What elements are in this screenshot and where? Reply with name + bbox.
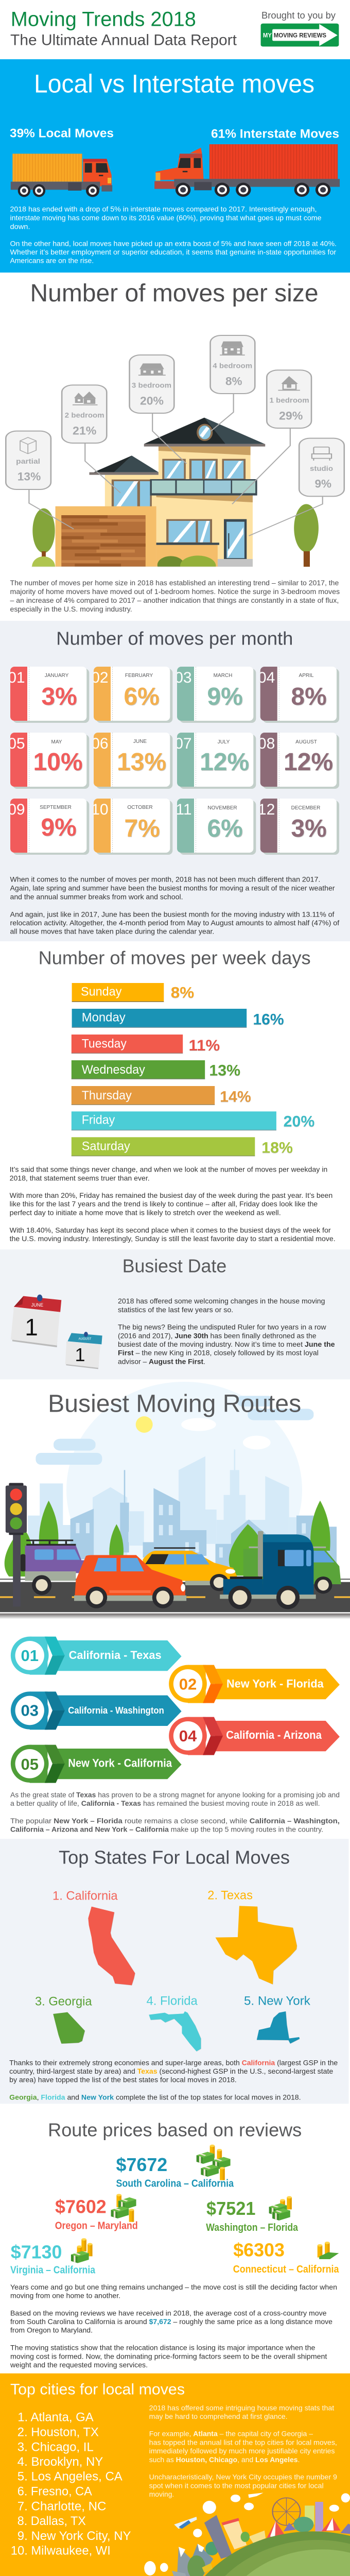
- card: march: MARCH: [214, 673, 232, 679]
- heading: Top States For Local Moves: [59, 1846, 290, 1868]
- bar: tuesday: Tuesday: [82, 1037, 127, 1050]
- text block: – an increase of 4% compared to 2017 – another indication that things are constantly in a state of flux,: [10, 596, 339, 604]
- state: california: 1. California: [52, 1889, 118, 1903]
- card: december: [258, 799, 339, 855]
- bubble: 2 bedroom: 21%: [73, 424, 96, 437]
- text block: immediately followed by much more justifiable city entries: [149, 2447, 335, 2455]
- route 05: New York - California: [68, 1756, 172, 1769]
- bar: saturday: Saturday: [82, 1140, 130, 1154]
- panel: top states for local moves: [0, 1839, 349, 2104]
- text block: Americans are on the rise.: [10, 257, 94, 265]
- text block: majority of home movers have moved out of 1-bedroom homes. Notice the surge in 3-bedroom moves: [10, 587, 340, 596]
- bar: wednesday: [72, 1060, 240, 1079]
- text block: busiest date of the moving industry. Now it’s time to meet June the: [118, 1340, 335, 1348]
- bar: monday: [72, 1009, 284, 1028]
- state: texas: 2. Texas: [207, 1889, 253, 1903]
- text block: such as Houston, Chicago, and Los Angeles.: [149, 2455, 300, 2464]
- bar chart: [72, 983, 314, 1157]
- bubble: studio: [299, 438, 344, 496]
- heading: Busiest Moving Routes: [48, 1391, 301, 1418]
- card: march: [174, 667, 256, 723]
- text block: has topped the annual list of the top cities for local moves,: [149, 2438, 337, 2446]
- card: february: 02: [91, 669, 109, 686]
- city list: 5. Los Angeles, CA: [18, 2470, 122, 2484]
- card: march: 03: [174, 669, 192, 686]
- route 04: California - Arizona: [226, 1728, 322, 1741]
- card: may: MAY: [51, 739, 62, 745]
- text block: all house moves that have taken place during the calendar year.: [10, 927, 214, 936]
- price: connecticut to california: Connecticut – California: [233, 2264, 339, 2275]
- text block: Uncharacteristically, New York City occupies the number 9: [149, 2473, 337, 2481]
- icon: red truck: [154, 144, 340, 197]
- bar: monday: 16%: [253, 1011, 284, 1028]
- illustration: city traffic: [0, 1382, 350, 1619]
- state: florida: 4. Florida: [146, 1994, 198, 2008]
- card: december: DECEMBER: [291, 805, 320, 811]
- text block: Whether it’s better employment or superior education, it seems that genuine in-state opportunities for: [10, 248, 336, 256]
- text block: [149, 2403, 337, 2498]
- state: california: [52, 1889, 135, 1985]
- price: south carolina to california: [116, 2145, 234, 2190]
- bubble: 4 bedroom: 4 bedroom: [213, 361, 252, 369]
- card: january: JANUARY: [45, 673, 69, 679]
- bubble: 2 bedroom: 2 bedroom: [65, 411, 104, 419]
- bubble: partial: 13%: [18, 470, 41, 483]
- bar: wednesday: Wednesday: [82, 1063, 145, 1077]
- price: oregon to maryland: Oregon – Maryland: [55, 2221, 138, 2232]
- bubble: 2 bedroom: [62, 385, 107, 443]
- card: december: 12: [258, 801, 275, 818]
- card: november: 6%: [207, 815, 243, 842]
- logo: my moving reviews: MOVING REVIEWS: [274, 31, 326, 39]
- route 05: [11, 1745, 182, 1783]
- icon: yellow truck: [11, 154, 112, 197]
- city list: [11, 2410, 131, 2558]
- text block: weight and the requested moving services.: [10, 2361, 148, 2369]
- card: june: 13%: [117, 749, 166, 776]
- price: washington to florida: Washington – Florida: [206, 2222, 299, 2233]
- heading: Local vs Interstate moves: [34, 69, 314, 98]
- text block: When it comes to the number of moves per month, 2018 has not been much different than 2017.: [10, 875, 320, 884]
- card: july: [174, 733, 256, 789]
- panel: moves per month: [0, 621, 350, 941]
- text block: like this for the last 7 years and the trend is likely to continue – after all, Friday does look like the: [10, 1200, 318, 1208]
- route 02: New York - Florida: [226, 1677, 324, 1690]
- card: march: 9%: [207, 683, 243, 710]
- panel: top cities for local moves: [0, 2374, 350, 2576]
- illustration: globe with city: [139, 2493, 350, 2576]
- text block: 2018 has offered some intriguing house moving stats that: [149, 2403, 334, 2412]
- text block: First – the new King in 2018, closely followed by its most loyal: [118, 1349, 319, 1357]
- text block: [10, 1165, 336, 1243]
- text block: down.: [10, 223, 30, 231]
- logo: my moving reviews: MY: [263, 31, 272, 39]
- card: december: 3%: [291, 815, 327, 842]
- bubble: 4 bedroom: 8%: [225, 375, 242, 387]
- text block: from South Carolina to California is around $7,672 – roughly the same price as a long distance move: [10, 2317, 332, 2326]
- local moves label: 39% Local Moves: [10, 127, 114, 141]
- text block: (2016 and 2017), June 30th has been finally dethroned as the: [118, 1331, 317, 1340]
- card: april: [258, 667, 339, 723]
- text block: [118, 1297, 335, 1365]
- bubble: 4 bedroom: [211, 335, 255, 394]
- text block: perfect day to initiate a home move that is likely to stretch over the weekend as well.: [10, 1208, 281, 1216]
- card: august: 08: [258, 735, 275, 752]
- panel: local vs interstate moves: [0, 59, 350, 273]
- blue truck: [258, 1531, 264, 1577]
- card: september: [8, 799, 89, 855]
- text block: especially in the U.S. moving industry.: [10, 605, 132, 613]
- card: january: 01: [8, 669, 25, 686]
- price: connecticut to california: [233, 2239, 339, 2275]
- bar: thursday: Thursday: [82, 1089, 132, 1103]
- city list: 3. Chicago, IL: [18, 2440, 94, 2454]
- icon: august calendar: 1: [75, 1344, 85, 1365]
- panel: route prices: [10, 2120, 339, 2369]
- card: april: APRIL: [299, 673, 314, 679]
- text block: [10, 875, 339, 936]
- card: june: JUNE: [133, 739, 147, 744]
- text block: 2018 has offered some welcoming changes in the house moving: [118, 1297, 325, 1305]
- state: georgia: 3. Georgia: [35, 1995, 92, 2009]
- card: september: 9%: [41, 814, 77, 841]
- heading: Number of moves per week days: [39, 947, 311, 969]
- bubble: partial: partial: [16, 457, 40, 465]
- card: january: 3%: [41, 683, 77, 710]
- text block: As the great state of Texas has proven to be a strong magnet for anyone looking for a promising job and: [10, 1790, 340, 1799]
- card: august: AUGUST: [295, 739, 317, 745]
- text block: The popular New York – Florida route remains a close second, while California – Washington,: [10, 1817, 340, 1825]
- text block: moving from one home to another.: [10, 2292, 120, 2300]
- card: july: 12%: [200, 749, 249, 776]
- bar: tuesday: [72, 1035, 220, 1054]
- text block: [10, 205, 337, 265]
- logo: my moving reviews: [261, 24, 339, 46]
- bar: friday: Friday: [82, 1113, 115, 1127]
- text block: And again, just like in 2017, June has been the busiest month for the moving industry with 13.11% of: [10, 910, 335, 918]
- state: florida: [146, 1994, 201, 2052]
- text block: 2018 has ended with a drop of 5% in interstate moves compared to 2017. Interestingly enough,: [10, 205, 317, 213]
- card: april: 8%: [291, 683, 327, 710]
- panel: busiest moving routes: [0, 1382, 350, 1834]
- text block: [10, 579, 340, 613]
- text block: country, third-largest state by area) and Texas (second-highest GSP in the U.S., second-largest state: [9, 2067, 333, 2075]
- bubble: 3 bedroom: [130, 355, 174, 413]
- card: november: [176, 799, 256, 855]
- bar: tuesday: 11%: [188, 1037, 220, 1054]
- card: may: [8, 733, 89, 789]
- heading: Number of moves per month: [56, 628, 293, 649]
- price: washington to florida: [206, 2196, 299, 2233]
- card: july: JULY: [218, 739, 230, 745]
- sponsor line: Brought to you by: [261, 10, 336, 21]
- price: south carolina to california: $7672: [116, 2154, 167, 2175]
- card: july: 07: [174, 735, 192, 752]
- bar: thursday: 14%: [220, 1088, 251, 1105]
- route 03: 03: [21, 1702, 39, 1720]
- route 01: 01: [21, 1647, 39, 1665]
- heading: Top cities for local moves: [10, 2381, 185, 2398]
- city list: 9. New York City, NY: [18, 2529, 131, 2543]
- icon: august calendar: AUGUST: [78, 1337, 92, 1341]
- card: february: [91, 667, 172, 723]
- text block: Georgia, Florida and New York complete the list of the top states for local moves in 2018.: [9, 2093, 301, 2102]
- text block: advisor – August the First.: [118, 1357, 205, 1365]
- bubble: 1 bedroom: 1 bedroom: [270, 396, 309, 404]
- route 02: 02: [179, 1675, 197, 1693]
- interstate moves label: 61% Interstate Moves: [211, 127, 339, 141]
- yellow car: [154, 1547, 195, 1549]
- text block: Based on the moving reviews we have received in 2018, the average cost of a cross-country move: [10, 2309, 327, 2317]
- text block: On the other hand, local moves have picked up an extra boost of 5% and have seen off 2018 at 40%.: [10, 239, 337, 247]
- text block: spot when it comes to the most popular cities for local: [149, 2481, 324, 2489]
- card: february: FEBRUARY: [125, 673, 153, 679]
- bar: friday: 20%: [284, 1113, 314, 1130]
- text block: the U.S. moving industry. Interestingly, Sunday is still the least favorite day to start a residential move.: [10, 1234, 336, 1243]
- card: september: 09: [8, 801, 25, 818]
- card: may: 05: [8, 735, 25, 752]
- text block: For example, Atlanta – the capital city of Georgia –: [149, 2430, 313, 2438]
- bar: wednesday: 13%: [209, 1062, 240, 1079]
- card: february: 6%: [124, 683, 160, 710]
- route 01: [11, 1637, 182, 1675]
- bubble: 1 bedroom: 29%: [279, 410, 303, 422]
- price: connecticut to california: $6303: [233, 2239, 285, 2260]
- icon: june calendar: 1: [25, 1314, 38, 1341]
- text block: by area) have topped the list of the best states for local moves in 2018.: [9, 2076, 237, 2084]
- bubble: partial: [6, 431, 51, 489]
- route 04: 04: [179, 1727, 197, 1745]
- title: Moving Trends 2018: [11, 8, 196, 31]
- heading: Busiest Date: [122, 1255, 226, 1276]
- text block: Years come and go but one thing remains unchanged – the move cost is still the deciding factor when: [10, 2283, 337, 2291]
- text block: moving.: [149, 2490, 174, 2498]
- card: october: OCTOBER: [127, 805, 153, 810]
- text block: California – Arizona and New York – California make up the top 5 moving routes in the country.: [10, 1825, 323, 1834]
- heading: Number of moves per size: [30, 280, 318, 307]
- text block: may be hard to comprehend at first glance.: [149, 2412, 288, 2420]
- city list: 10. Milwaukee, WI: [11, 2544, 111, 2558]
- text block: [10, 1790, 340, 1834]
- text block: 2018, that statement seems truer than ever.: [10, 1174, 150, 1182]
- icon: june calendar: [11, 1295, 61, 1347]
- card: june: [91, 733, 172, 789]
- state: new york: 5. New York: [244, 1994, 311, 2008]
- card: may: 10%: [33, 749, 83, 776]
- city list: 2. Houston, TX: [18, 2425, 99, 2439]
- text block: moving cost is formed. Now, the dominating price-forming factors seem to be the overall shipment: [10, 2352, 327, 2360]
- purple car: [26, 1539, 73, 1541]
- text block: interstate moving has come down to its 2016 value (60%), proving that what goes up must come: [10, 214, 322, 222]
- text block: from Oregon to Maryland.: [10, 2326, 93, 2334]
- route 01: California - Texas: [69, 1649, 162, 1662]
- panel: moves per size: [0, 280, 350, 613]
- illustration: house: [0, 418, 350, 577]
- price: south carolina to california: South Carolina – California: [116, 2178, 234, 2190]
- city list: 6. Fresno, CA: [18, 2484, 92, 2498]
- text block: relocation activity. Altogether, the 4-month period from May to August amounts to almost half (47%) of: [10, 919, 339, 927]
- road: [0, 1579, 350, 1580]
- bar: monday: Monday: [82, 1011, 126, 1025]
- bubble: 1 bedroom: [267, 370, 311, 428]
- price: washington to florida: $7521: [206, 2198, 255, 2219]
- card: august: [258, 733, 339, 789]
- card: january: [8, 667, 89, 723]
- bubble: 3 bedroom: 3 bedroom: [132, 381, 171, 389]
- route 03: California - Washington: [68, 1705, 164, 1716]
- text block: Thanks to their extremely strong economies and super-large areas, both California (largest GSP in the: [9, 2058, 338, 2066]
- state: texas: [207, 1889, 297, 1985]
- city list: 7. Charlotte, NC: [18, 2499, 106, 2513]
- route 05: 05: [21, 1755, 39, 1773]
- text block: With more than 20%, Friday has remained the busiest day of the week during the past year. It’s been: [10, 1191, 332, 1199]
- card: october: [91, 799, 172, 855]
- city list: 4. Brooklyn, NY: [18, 2455, 103, 2469]
- card: november: NOVEMBER: [207, 805, 237, 811]
- text block: [10, 2283, 337, 2369]
- route 04: [169, 1717, 340, 1755]
- bar: saturday: [72, 1137, 293, 1157]
- route 03: [11, 1691, 182, 1730]
- state: georgia: [35, 1995, 92, 2044]
- text block: and the annual summer breaks from work and school.: [10, 892, 183, 901]
- bar: saturday: 18%: [261, 1140, 293, 1157]
- text block: a better quality of life, California - Texas has remained the busiest moving route in 2018 as well.: [10, 1799, 320, 1807]
- icon: june calendar: JUNE: [31, 1302, 43, 1308]
- text block: Again, late spring and summer have been the busiest months for moving a result of the nicer weather: [10, 884, 335, 892]
- price: oregon to maryland: [55, 2194, 138, 2232]
- icon: august calendar: [65, 1332, 102, 1369]
- text block: It’s said that some things never change, and when we look at the number of moves per weekday in: [10, 1165, 327, 1173]
- card: august: 12%: [284, 749, 333, 776]
- green van: [243, 1549, 341, 1584]
- bar: friday: [72, 1111, 314, 1130]
- price: virginia to california: Virginia – California: [10, 2265, 96, 2276]
- bar: sunday: [72, 983, 194, 1002]
- text block: The big news? Being the undisputed Ruler for two years in a row: [118, 1323, 326, 1331]
- card: april: 04: [258, 669, 275, 686]
- red car: [75, 1555, 185, 1596]
- bar: thursday: [72, 1086, 251, 1105]
- route 02: [169, 1665, 340, 1703]
- subtitle: The Ultimate Annual Data Report: [10, 31, 237, 48]
- city list: 1. Atlanta, GA: [18, 2410, 94, 2424]
- card: october: 10: [91, 801, 109, 818]
- state: new york: [244, 1994, 311, 2044]
- price: oregon to maryland: $7602: [55, 2196, 107, 2217]
- bar: sunday: 8%: [171, 985, 194, 1002]
- text block: The moving statistics show that the relocation distance is losing its major importance when the: [10, 2344, 316, 2352]
- city list: 8. Dallas, TX: [18, 2514, 86, 2528]
- bubble: 3 bedroom: 20%: [140, 395, 164, 408]
- text block: [9, 2058, 338, 2102]
- text block: The number of moves per home size in 2018 has established an interesting trend – similar to 2017, the: [10, 579, 339, 587]
- bar: sunday: Sunday: [81, 985, 121, 999]
- bubble: studio: 9%: [315, 478, 331, 490]
- price: virginia to california: [10, 2238, 96, 2276]
- price: virginia to california: $7130: [11, 2241, 62, 2262]
- text block: With 18.40%, Saturday has kept its second place when it comes to the busiest days of the week for: [10, 1226, 331, 1234]
- bubble: studio: studio: [310, 464, 333, 472]
- bubble leaders: [29, 394, 323, 536]
- card: november: 11: [176, 801, 192, 818]
- panel: busiest date: [0, 1249, 350, 1379]
- card: june: 06: [91, 735, 109, 752]
- card: october: 7%: [124, 815, 160, 842]
- text block: statistics of the last few years or so.: [118, 1306, 233, 1314]
- panel: moves per week days: [10, 947, 336, 1243]
- card: september: SEPTEMBER: [40, 805, 72, 810]
- panel: header: [10, 8, 339, 48]
- heading: Route prices based on reviews: [48, 2120, 302, 2141]
- traffic light: [13, 1534, 21, 1606]
